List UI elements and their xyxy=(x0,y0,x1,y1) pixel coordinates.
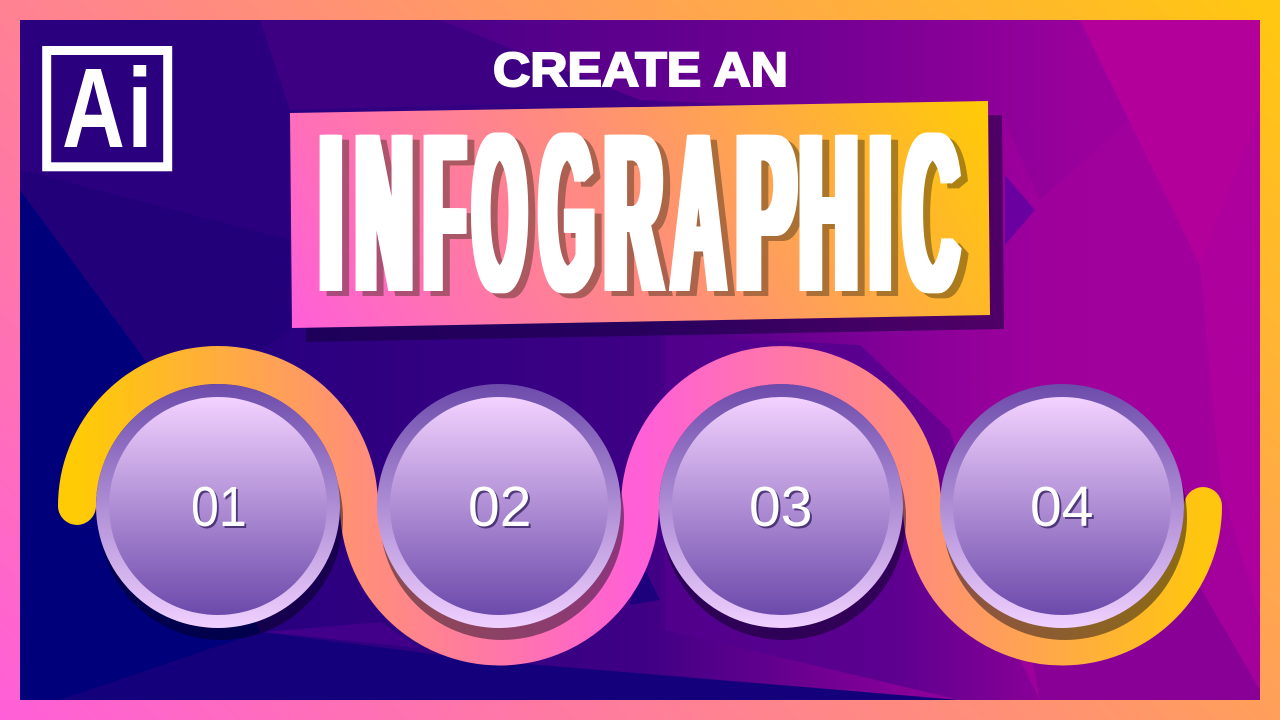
heading: infographic: R xyxy=(605,87,662,340)
heading: infographic: C xyxy=(904,87,958,340)
step 02 xyxy=(377,384,624,640)
banner xyxy=(290,101,990,328)
Ai logo: i xyxy=(127,44,153,171)
banner shadow xyxy=(304,115,1004,342)
Ai logo: A xyxy=(62,46,125,172)
step 02: 02 xyxy=(468,475,531,539)
step 04 xyxy=(940,384,1187,640)
step 03: 03 xyxy=(749,475,812,539)
step 01 xyxy=(96,384,343,640)
step 03 xyxy=(659,384,906,640)
heading: infographic: G xyxy=(540,87,594,340)
heading: infographic: H xyxy=(800,87,857,340)
step 04: 04 xyxy=(1030,475,1093,539)
heading: infographic: P xyxy=(737,87,795,340)
heading: infographic: F xyxy=(424,87,465,340)
heading: infographic: I xyxy=(870,87,891,340)
wavy ribbon xyxy=(77,365,1203,646)
heading: infographic: A xyxy=(672,87,725,340)
heading: create an: CREATE AN xyxy=(493,44,788,97)
heading: infographic: N xyxy=(356,87,412,340)
heading: infographic: I xyxy=(320,87,342,340)
heading: infographic: O xyxy=(473,87,526,340)
Ai logo xyxy=(47,44,168,172)
step 01: 01 xyxy=(191,475,247,539)
